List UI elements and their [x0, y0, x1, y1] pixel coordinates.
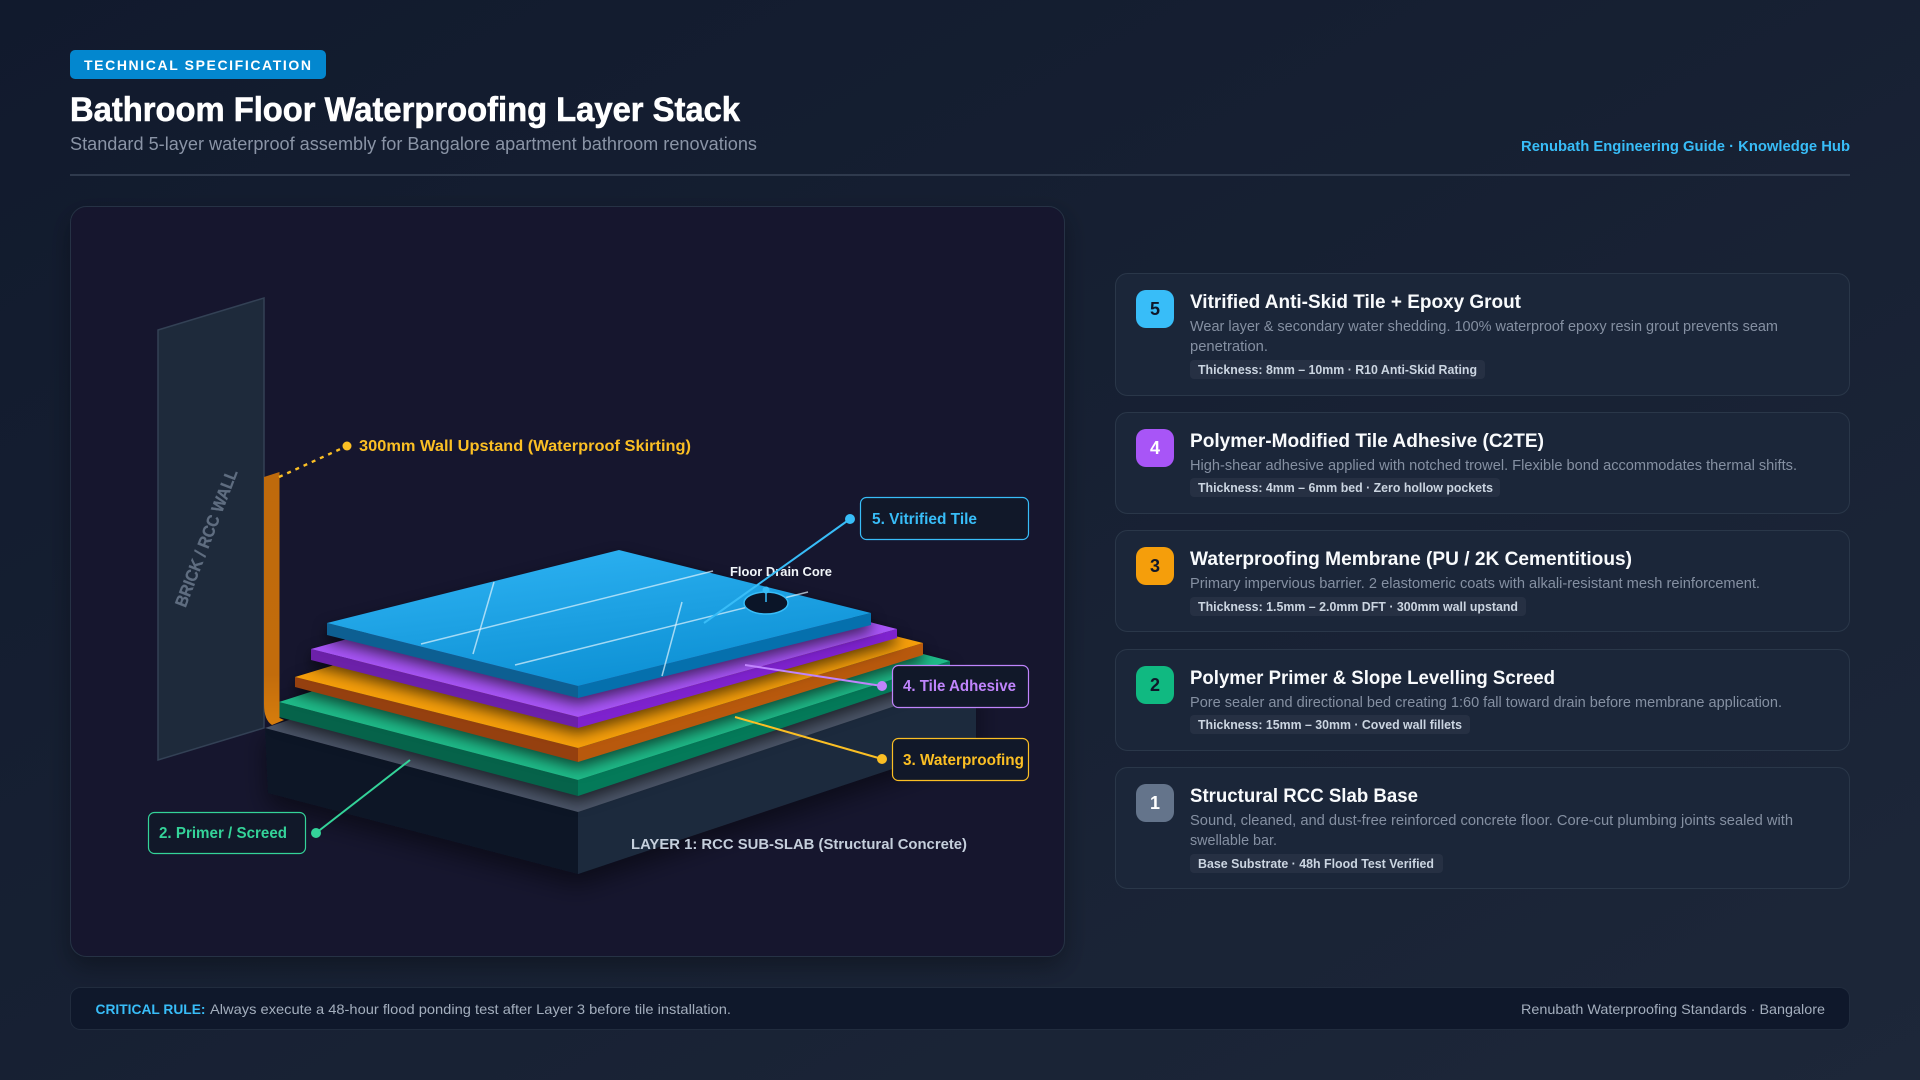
callout: 2 primer and screed: 2. Primer / Screed	[159, 825, 287, 842]
layer 1: RCC slab	[265, 595, 976, 874]
card: layer 4: High-shear adhesive applied with notched trowel. Flexible bond accommodates thermal shifts.	[1190, 458, 1797, 474]
footer credit: Renubath Waterproofing Standards · Bangalore	[1521, 1001, 1825, 1017]
callout: 3 waterproofing: 3. Waterproofing	[903, 752, 1024, 769]
critical rule note: CRITICAL RULE:	[96, 1001, 206, 1017]
card: layer 4: Polymer-Modified Tile Adhesive (C2TE)	[1190, 431, 1544, 452]
callout: 5 vitrified tile	[704, 498, 1028, 623]
card: layer 4	[1116, 412, 1850, 514]
card: layer 1: Sound, cleaned, and dust-free reinforced concrete floor. Core-cut plumbing joints sealed with	[1190, 813, 1793, 829]
callout: wall upstand	[279, 438, 691, 477]
footer bar	[70, 988, 1850, 1030]
card: layer 5: Wear layer & secondary water shedding. 100% waterproof epoxy resin grout prevents seam	[1190, 319, 1778, 335]
card: layer 2: Polymer Primer & Slope Levelling Screed	[1190, 668, 1555, 689]
callout: 5 vitrified tile: 5. Vitrified Tile	[872, 511, 977, 528]
card: layer 1: Base Substrate · 48h Flood Test Verified	[1198, 857, 1434, 871]
panel: layer stack diagram	[70, 206, 1064, 956]
badge: technical specification	[70, 50, 326, 79]
layer 3: waterproofing membrane	[295, 572, 923, 762]
card: layer 5: 5	[1150, 299, 1160, 319]
card: layer 2: Pore sealer and directional bed creating 1:60 fall toward drain before membrane application.	[1190, 695, 1782, 711]
callout: 2 primer and screed	[148, 760, 410, 854]
card: layer 3: Thickness: 1.5mm – 2.0mm DFT · 300mm wall upstand	[1198, 600, 1518, 614]
card: layer 1: Structural RCC Slab Base	[1190, 786, 1418, 807]
card: layer 3: Waterproofing Membrane (PU / 2K Cementitious)	[1190, 549, 1632, 570]
layer 2: primer and screed	[279, 583, 950, 796]
subtitle: Standard 5-layer waterproof assembly for Bangalore apartment bathroom renovations	[70, 134, 757, 154]
card: layer 3	[1116, 530, 1850, 632]
card: layer 1	[1116, 768, 1850, 888]
card: layer 2: 2	[1150, 675, 1160, 695]
card: layer 1: 1	[1150, 793, 1160, 813]
card: layer 5	[1116, 274, 1850, 396]
header	[70, 50, 1850, 176]
card: layer 5: Vitrified Anti-Skid Tile + Epoxy Grout	[1190, 292, 1522, 313]
card: layer 3: Primary impervious barrier. 2 elastomeric coats with alkali-resistant mesh reinforcement.	[1190, 576, 1760, 592]
layer 5: vitrified tile	[327, 550, 871, 698]
card: layer 5: penetration.	[1190, 339, 1268, 355]
card: layer 2: Thickness: 15mm – 30mm · Coved wall fillets	[1198, 718, 1462, 732]
callout: 4 tile adhesive: 4. Tile Adhesive	[903, 678, 1016, 695]
floor drain core	[730, 564, 832, 614]
floor drain core: Floor Drain Core	[730, 564, 832, 579]
callout: 3 waterproofing	[735, 717, 1028, 780]
card: layer 1: swellable bar.	[1190, 833, 1277, 849]
card: layer 2	[1116, 650, 1850, 750]
brick / RCC wall: BRICK / RCC WALL	[171, 467, 241, 610]
slab label: LAYER 1: RCC SUB-SLAB (Structural Concrete)	[631, 837, 967, 853]
badge: technical specification: TECHNICAL SPECIFICATION	[84, 57, 311, 73]
card: layer 4: Thickness: 4mm – 6mm bed · Zero hollow pockets	[1198, 481, 1493, 495]
card: layer 3: 3	[1150, 556, 1160, 576]
tile grout seams	[421, 571, 808, 676]
callout: 4 tile adhesive	[745, 665, 1028, 708]
brick / RCC wall	[158, 298, 264, 760]
wall upstand	[264, 472, 284, 725]
critical rule note: Always execute a 48-hour flood ponding test after Layer 3 before tile installation.	[210, 1001, 731, 1017]
layer 4: tile adhesive	[311, 561, 897, 728]
title: Bathroom Floor Waterproofing Layer Stack	[70, 91, 740, 129]
source credit: Renubath Engineering Guide · Knowledge Hub	[1521, 138, 1850, 155]
card: layer 5: Thickness: 8mm – 10mm · R10 Anti-Skid Rating	[1198, 363, 1477, 377]
callout: wall upstand: 300mm Wall Upstand (Waterproof Skirting)	[359, 438, 691, 455]
card: layer 4: 4	[1150, 438, 1160, 458]
